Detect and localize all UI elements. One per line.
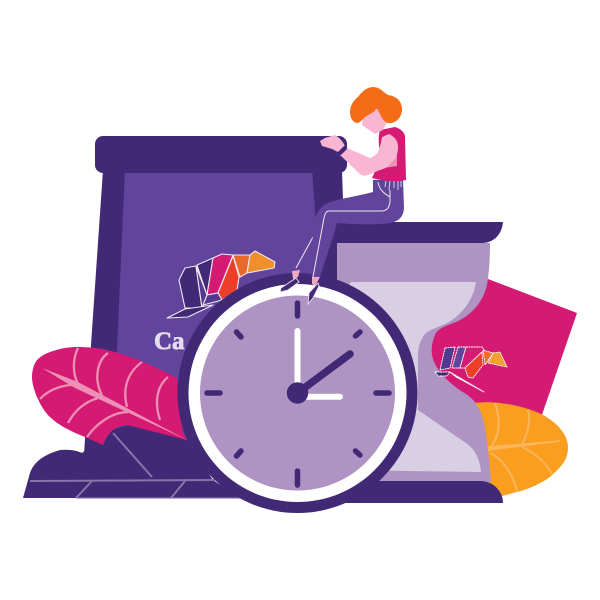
hourglass top cap [337,222,503,243]
front shoe [308,283,319,304]
torso top [372,127,406,181]
bag body [83,170,345,470]
bag brand text: Ca [154,328,185,355]
seated figure [280,87,406,304]
bear logo on bag [167,251,275,318]
back leg seam [296,237,313,268]
hourglass base [300,481,503,503]
hourglass sand [340,282,481,472]
foliage veins [30,433,240,498]
orange leaf [473,402,568,496]
hair [350,87,402,123]
clock ticks [207,303,389,485]
wrist watch [338,145,347,155]
bag top cap [95,136,347,173]
pink leaf [32,347,187,445]
neck and face [362,106,387,134]
small bear logo on card [435,347,507,392]
clock hands [287,331,350,404]
trousers [311,180,404,277]
pink leaf midrib [42,368,187,440]
clock outer ring [178,273,418,513]
hourglass glass [337,243,491,482]
clock white bezel [188,284,406,502]
hand [320,135,345,152]
pink leaf veins [40,348,168,437]
clock face [200,296,395,490]
orange leaf veins [489,403,560,491]
back shoe [280,278,299,292]
arm [340,134,398,176]
clock [178,273,418,513]
bag [83,136,347,470]
back foot [292,270,300,279]
left dark foliage [23,425,240,498]
hourglass [300,222,503,503]
bag front panel [112,169,320,460]
waist fringe [385,181,401,190]
trouser seam and pocket [313,182,390,277]
pink card behind hourglass [425,279,577,435]
armpit shading [384,150,397,168]
front foot [312,277,320,286]
